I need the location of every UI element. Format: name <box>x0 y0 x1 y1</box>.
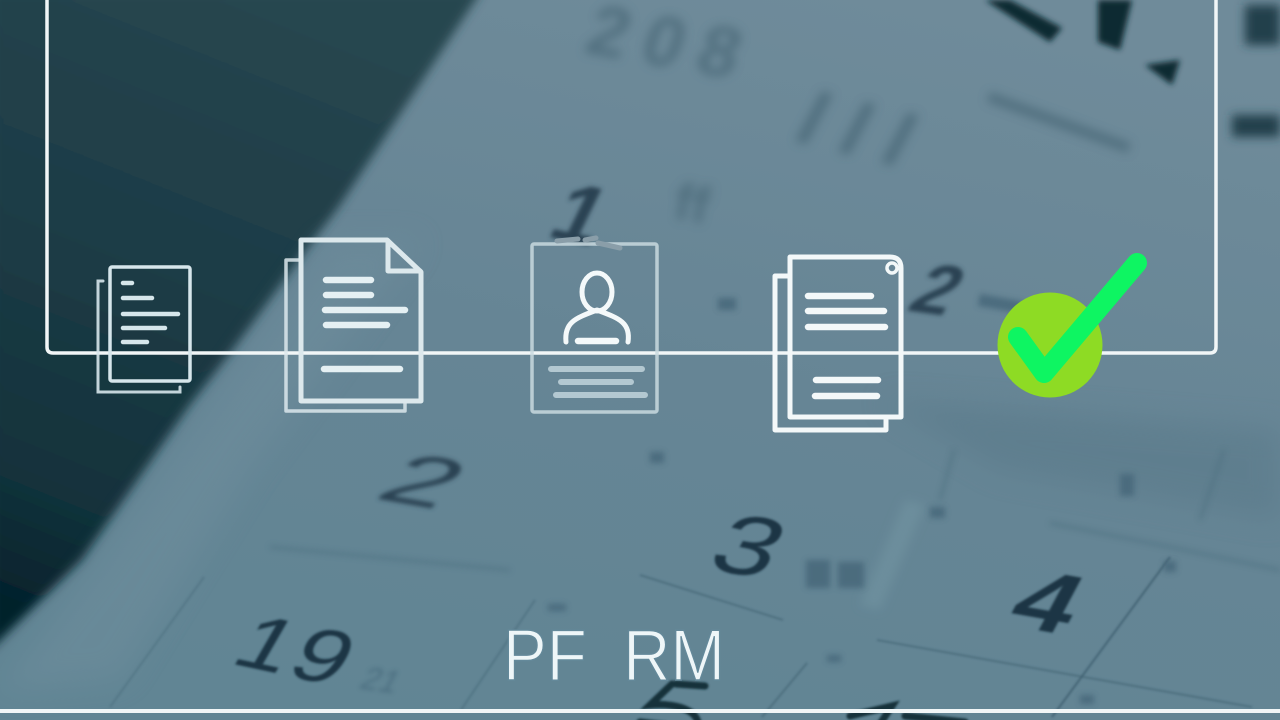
background: calendar grid lines <box>110 557 1252 717</box>
background: sharp numerals: 3 <box>695 496 804 596</box>
background: light paper streak <box>871 510 913 600</box>
icon: large document with folded corner <box>286 240 421 411</box>
background: sharp numerals: 19 <box>219 599 376 702</box>
background: soft numerals: 1 <box>537 167 625 263</box>
background: dark blobs right of frame <box>1232 5 1280 137</box>
icon: green check badge <box>998 263 1137 398</box>
person glyph <box>566 273 628 342</box>
icon: small document stack <box>98 267 190 392</box>
bottom rule line <box>0 709 1280 713</box>
background: soft numerals <box>376 184 965 510</box>
background: small faint numerals: 21 <box>354 662 407 700</box>
background: soft numerals: 2 <box>897 249 980 330</box>
background: small blurred marks <box>548 294 1176 704</box>
heading: PF RM: PF RM <box>503 616 725 696</box>
icon: document stack with corner hole <box>775 257 901 430</box>
background: blurred header text: III <box>781 75 954 188</box>
background: dark corner marks <box>985 0 1180 85</box>
background: darker mid shading <box>880 400 1280 520</box>
icon: profile card with clip <box>532 238 657 412</box>
background: soft numerals: 2 <box>360 439 487 523</box>
frame: white open rectangle above the icons <box>47 0 1216 353</box>
background: blurred header text <box>577 0 1131 236</box>
background: cropped numeral marks at the bottom edge <box>640 684 965 720</box>
background: lighter paper edge <box>0 240 420 690</box>
background: soft grid lines <box>270 450 1280 570</box>
background: sharp numerals <box>234 516 1083 683</box>
background: sharp numerals: 4 <box>995 552 1101 652</box>
background: blurred header text: ff <box>670 173 715 236</box>
background: dark desk area <box>0 0 482 650</box>
